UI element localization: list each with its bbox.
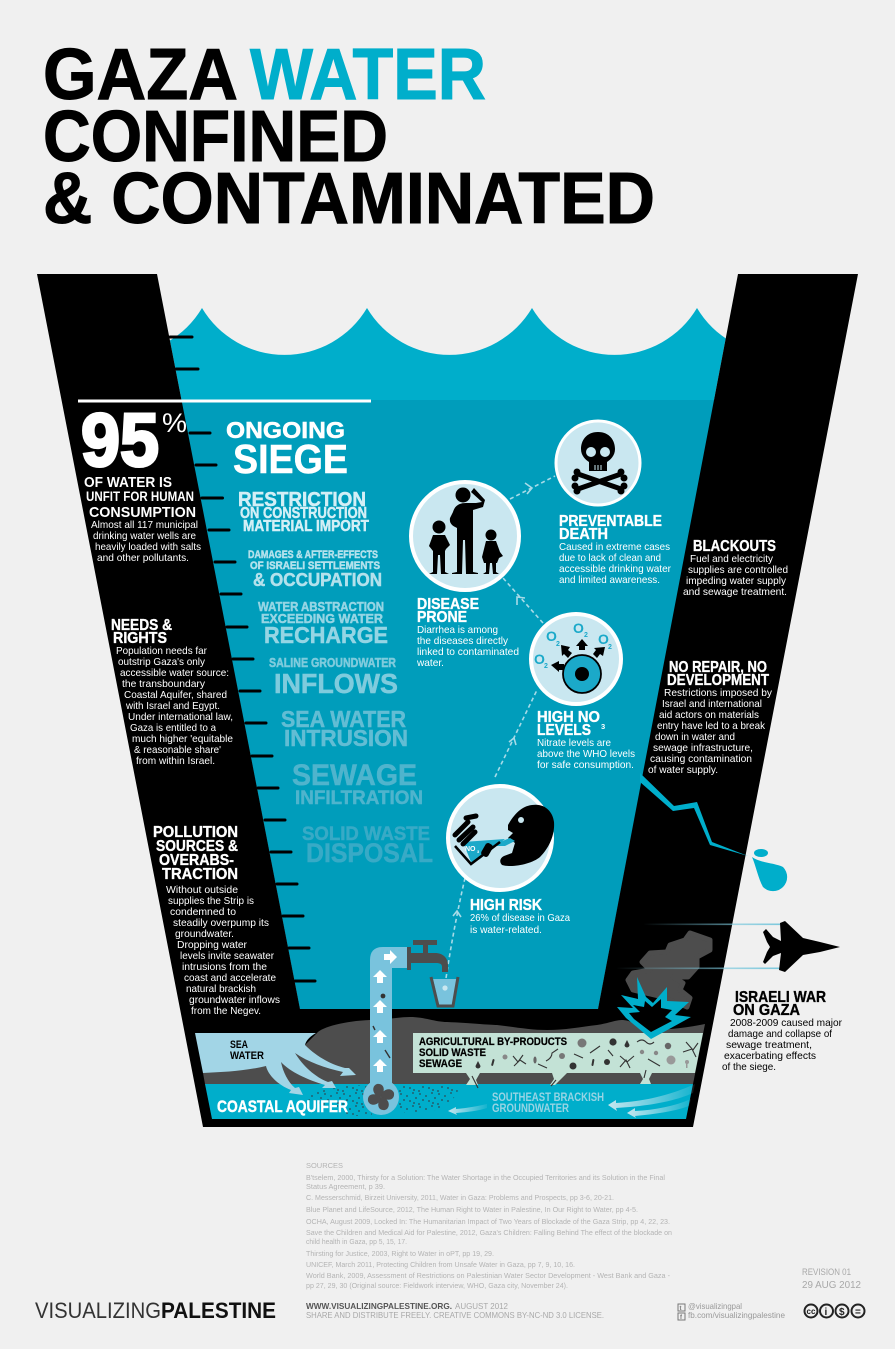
text block: no repair no development: causing contamination — [650, 754, 752, 765]
text block: preventable death — [559, 513, 672, 586]
text block: needs and rights: the transboundary — [122, 679, 206, 690]
contaminant panel — [413, 1033, 703, 1088]
aquifer sediment dots — [305, 1085, 458, 1116]
title: WATER — [250, 35, 486, 115]
text block: needs and rights: much higher 'equitable — [132, 734, 233, 745]
text block: pollution sources: from the Negev. — [191, 1006, 261, 1017]
text block: needs and rights — [111, 617, 233, 767]
cause: sewage infiltration: SEWAGE — [292, 759, 417, 792]
text block: preventable death: and limited awareness. — [559, 575, 660, 586]
text block: pollution sources: POLLUTION — [153, 824, 238, 841]
text block: disease prone: Diarrhea is among — [417, 625, 498, 636]
sources: Status Agreement, p 39. — [306, 1182, 385, 1191]
text block: blackouts: BLACKOUTS — [693, 538, 776, 555]
cause: saline groundwater inflows — [269, 656, 398, 699]
label: coastal aquifer: COASTAL AQUIFER — [217, 1097, 348, 1116]
crack in wall — [640, 773, 748, 856]
text block: Israeli war on Gaza: ON GAZA — [733, 1002, 800, 1019]
icon: drinking head circle: NO — [465, 846, 476, 853]
text block: Israeli war on Gaza: exacerbating effects — [724, 1051, 816, 1062]
icon: skull circle — [556, 421, 640, 505]
text block: Israeli war on Gaza — [722, 989, 843, 1073]
text block: needs and rights: Under international law, — [128, 712, 233, 723]
stat: 95 percent: and other pollutants. — [97, 553, 189, 564]
text block: blackouts — [683, 538, 788, 598]
stat: 95 percent: heavily loaded with salts — [95, 542, 201, 553]
stat: 95 percent: Almost all 117 municipal — [91, 520, 198, 531]
revision date: REVISION 01 — [802, 1267, 851, 1278]
text block: high NO3 levels: 3 — [601, 722, 605, 731]
title — [43, 35, 655, 239]
cause: construction material restriction — [238, 489, 369, 535]
text block: high risk: 26% of disease in Gaza — [470, 913, 570, 924]
social handles — [678, 1301, 785, 1321]
creative commons icons: = — [855, 1307, 861, 1318]
text block: Israeli war on Gaza: sewage treatment, — [726, 1040, 812, 1051]
text block: no repair no development: DEVELOPMENT — [667, 672, 769, 689]
social handles: f — [680, 1315, 683, 1321]
creative commons icons: $ — [839, 1307, 845, 1318]
sources: OCHA, August 2009, Locked In: The Humanitarian Impact of Two Years of Blockade of the Gaza Strip, pp 4, 22, 23. — [306, 1217, 670, 1226]
cause: solid waste disposal — [302, 823, 433, 868]
text block: Israeli war on Gaza: of the siege. — [722, 1062, 776, 1073]
icon: faucet — [407, 940, 448, 972]
title: GAZA — [43, 35, 238, 115]
text block: high NO3 levels: LEVELS — [537, 722, 591, 739]
figure: boy — [429, 520, 450, 574]
text block: needs and rights: Population needs far — [116, 646, 208, 657]
text block: pollution sources: levels invite seawater — [180, 951, 275, 962]
text block: needs and rights: & reasonable share' — [134, 745, 221, 756]
creative commons icons: i — [824, 1307, 828, 1318]
icon: nitrate circle: 2 — [556, 641, 560, 648]
icon: nitrate circle: 2 — [584, 632, 588, 639]
text block: pollution sources: OVERABS- — [159, 852, 234, 869]
text block: needs and rights: NEEDS & — [111, 617, 172, 634]
pump fan — [368, 1084, 394, 1110]
text block: disease prone: the diseases directly — [417, 636, 509, 647]
website and license: WWW.VISUALIZINGPALESTINE.ORG. — [306, 1301, 452, 1311]
text block: pollution sources: SOURCES & — [156, 838, 238, 855]
text block: Israeli war on Gaza: damage and collapse of — [728, 1029, 832, 1040]
logo: Visualizing Palestine: PALESTINE — [161, 1298, 276, 1323]
cause: solid waste disposal: SOLID WASTE — [302, 823, 430, 845]
icon: drinking head circle — [448, 786, 554, 890]
social handles: @visualizingpal — [688, 1301, 742, 1311]
text block: disease prone: DISEASE — [417, 596, 479, 613]
text block: pollution sources: supplies the Strip is — [168, 896, 254, 907]
text block: disease prone: PRONE — [417, 609, 467, 626]
text block: needs and rights: outstrip Gaza's only — [118, 657, 206, 668]
text block: high risk — [470, 897, 570, 936]
revision date: 29 AUG 2012 — [802, 1280, 861, 1291]
text block: Israeli war on Gaza: 2008-2009 caused major — [730, 1018, 843, 1029]
text block: preventable death: DEATH — [559, 526, 608, 543]
contaminant labels — [419, 1036, 567, 1070]
water tank: surface water with waves — [170, 308, 726, 1008]
icon: nitrate circle: 2 — [608, 644, 612, 651]
text block: blackouts: Fuel and electricity — [690, 554, 774, 565]
icon: nitrate circle: O — [573, 620, 584, 636]
contaminant labels: SOLID WASTE — [419, 1047, 486, 1059]
text block: blackouts: impeding water supply — [686, 576, 787, 587]
cause: ongoing siege: ONGOING — [226, 417, 345, 443]
stat: 95 percent — [81, 398, 201, 564]
text block: preventable death: Caused in extreme cases — [559, 542, 670, 553]
icon: nitrate circle: O — [546, 628, 557, 644]
text block: high NO3 levels: for safe consumption. — [537, 760, 634, 771]
icon: nitrate circle — [531, 614, 621, 704]
text block: pollution sources: groundwater. — [175, 929, 234, 940]
text block: no repair no development — [648, 659, 773, 776]
groundwater flow arrows — [448, 1084, 695, 1118]
figure: adult — [450, 488, 485, 574]
text block: high risk: HIGH RISK — [470, 897, 543, 914]
sources: SOURCES — [306, 1161, 343, 1170]
sources: UNICEF, March 2011, Protecting Children from Unsafe Water in Gaza, pp 7, 9, 10, 16. — [306, 1260, 575, 1269]
icon: water drop — [752, 849, 787, 891]
sea water with arrows — [195, 1033, 356, 1095]
cause: sewage infiltration — [292, 759, 423, 809]
container walls — [37, 274, 858, 1127]
level line — [78, 400, 371, 402]
text block: disease prone — [416, 596, 519, 669]
text block: needs and rights: RIGHTS — [113, 630, 167, 647]
text block: preventable death: accessible drinking water — [559, 564, 672, 575]
title: CONFINED — [43, 97, 388, 177]
text block: high NO3 levels: Nitrate levels are — [537, 738, 611, 749]
text block: high risk: is water-related. — [470, 925, 542, 936]
cause: sea water intrusion: SEA WATER — [281, 706, 406, 732]
sources — [306, 1161, 672, 1290]
figure: girl — [482, 530, 503, 574]
contaminant particles — [476, 1038, 689, 1070]
website and license — [306, 1301, 604, 1320]
sources: Blue Planet and LifeSource, 2012, The Human Right to Water in Palestine, In Our Right to Water, pp 4-5. — [306, 1205, 638, 1214]
sources: B'tselem, 2000, Thirsty for a Solution: The Water Shortage in the Occupied Territories and its Solution in the Final — [306, 1173, 665, 1182]
text block: disease prone: water. — [416, 658, 444, 669]
text block: no repair no development: entry have led to a break — [657, 721, 766, 732]
icon: fighter jet — [763, 921, 840, 972]
water tank: contaminated lower water — [181, 400, 715, 1009]
stat: 95 percent: UNFIT FOR HUMAN — [86, 489, 194, 504]
stat: 95 percent: 95 — [81, 398, 159, 482]
sources: C. Messerschmid, Birzeit University, 2011, Water in Gaza: Problems and Prospects, pp 3-6, 20-21. — [306, 1193, 614, 1202]
icon: cup of water — [431, 977, 458, 1006]
flow arrows — [373, 950, 397, 1072]
text block: disease prone: linked to contaminated — [417, 647, 519, 658]
text block: blackouts: supplies are controlled — [688, 565, 788, 576]
text block: pollution sources: natural brackish — [186, 984, 256, 995]
text block: Israeli war on Gaza: ISRAELI WAR — [735, 989, 826, 1006]
cause: abstraction exceeding recharge — [258, 599, 388, 648]
text block: pollution sources: Without outside — [166, 885, 238, 896]
label: southeast brackish groundwater — [492, 1092, 604, 1115]
pipe with pump — [363, 947, 407, 1115]
text block: preventable death: PREVENTABLE — [559, 513, 662, 530]
text block: high NO3 levels: above the WHO levels — [537, 749, 635, 760]
text block: pollution sources: intrusions from the — [182, 962, 267, 973]
sources: Save the Children and Medical Aid for Palestine, 2012, Gaza's Children: Falling Behind The effect of the blockade on — [306, 1228, 672, 1237]
text block: high NO3 levels: HIGH NO — [537, 709, 600, 726]
sources: Thirsting for Justice, 2003, Right to Water in oPT, pp 19, 29. — [306, 1249, 494, 1258]
label: sea water: WATER — [230, 1050, 264, 1062]
icon: nitrate circle: O — [534, 651, 545, 667]
level ticks — [170, 337, 315, 981]
cause: sea water intrusion — [281, 706, 408, 751]
coastal aquifer — [205, 1084, 693, 1119]
website and license: SHARE AND DISTRIBUTE FREELY. CREATIVE COMMONS BY-NC-ND 3.0 LICENSE. — [306, 1310, 604, 1320]
label: sea water: SEA — [230, 1039, 248, 1051]
cause: sea water intrusion: INTRUSION — [284, 725, 408, 751]
text block: preventable death: due to lack of clean and — [559, 553, 661, 564]
text block: needs and rights: with Israel and Egypt. — [125, 701, 220, 712]
text block: needs and rights: from within Israel. — [136, 756, 215, 767]
cause: settlements and occupation: & OCCUPATION — [253, 569, 382, 590]
cause: settlements and occupation: OF ISRAELI SETTLEMENTS — [250, 560, 380, 572]
text block: pollution sources — [153, 824, 280, 1017]
text block: no repair no development: Israel and international — [662, 699, 762, 710]
contaminant labels: SEWAGE — [419, 1058, 462, 1070]
social handles: t — [680, 1306, 682, 1312]
creative commons icons: cc — [806, 1307, 816, 1316]
cause: settlements and occupation — [248, 549, 382, 590]
creative commons icons — [804, 1304, 864, 1318]
ground layer — [203, 1017, 705, 1084]
text block: pollution sources: coast and accelerate — [184, 973, 276, 984]
logo: Visualizing Palestine: VISUALIZING — [35, 1298, 161, 1323]
smoke cloud — [628, 933, 710, 1007]
cause: abstraction exceeding recharge: WATER ABSTRACTION — [258, 599, 384, 614]
text block: pollution sources: TRACTION — [162, 866, 238, 883]
cause: ongoing siege: SIEGE — [233, 436, 348, 482]
cause: abstraction exceeding recharge: EXCEEDING WATER — [261, 611, 384, 626]
text block: pollution sources: Dropping water — [177, 940, 248, 951]
cause: construction material restriction: ON CONSTRUCTION — [240, 505, 367, 522]
text block: needs and rights: Gaza is entitled to a — [130, 723, 216, 734]
cause: saline groundwater inflows: INFLOWS — [274, 668, 398, 699]
explosion — [617, 977, 691, 1039]
icon: nitrate circle: O — [598, 631, 609, 647]
cause: abstraction exceeding recharge: RECHARGE — [264, 622, 388, 648]
icon: drinking head circle: 3 — [477, 849, 480, 854]
text block: pollution sources: steadily overpump its — [173, 918, 269, 929]
stat: 95 percent: OF WATER IS — [84, 475, 172, 491]
cause: ongoing siege — [226, 417, 348, 482]
sources: child health in Gaza, pp 5, 15, 17. — [306, 1237, 407, 1246]
stat: 95 percent: drinking water wells are — [93, 531, 196, 542]
icon: nitrate circle: 2 — [544, 663, 548, 670]
text block: needs and rights: Coastal Aquifer, shared — [124, 690, 227, 701]
text block: no repair no development: aid actors on materials — [659, 710, 759, 721]
cause: solid waste disposal: DISPOSAL — [306, 838, 433, 868]
sources: World Bank, 2009, Assessment of Restrictions on Palestinian Water Sector Development - West Bank and Gaza - — [306, 1271, 670, 1280]
causes list in water column — [226, 417, 433, 868]
title: & CONTAMINATED — [43, 159, 655, 239]
text block: no repair no development: NO REPAIR, NO — [669, 659, 767, 676]
text block: no repair no development: sewage infrastructure, — [653, 743, 753, 754]
website and license: AUGUST 2012 — [455, 1301, 508, 1311]
text block: blackouts: and sewage treatment. — [683, 587, 787, 598]
stat: 95 percent: CONSUMPTION — [89, 504, 196, 521]
text block: needs and rights: accessible water source: — [120, 668, 229, 679]
label: sea water — [230, 1039, 264, 1062]
contaminant labels: AGRICULTURAL BY-PRODUCTS — [419, 1036, 567, 1048]
text block: no repair no development: of water supply. — [648, 765, 718, 776]
jet trails — [616, 924, 780, 969]
text block: no repair no development: Restrictions imposed by — [664, 688, 773, 699]
dashed progression arrows — [445, 476, 555, 985]
label: southeast brackish groundwater: GROUNDWATER — [492, 1103, 570, 1115]
cause: sewage infiltration: INFILTRATION — [295, 787, 423, 809]
sources: pp 27, 29, 30 (Original source: Fieldwork interview, WHO, Gaza city, November 24). — [306, 1281, 568, 1290]
icon: family circle — [411, 482, 519, 590]
text block: pollution sources: groundwater inflows — [189, 995, 280, 1006]
text block: high NO3 levels — [537, 709, 635, 771]
text block: pollution sources: condemned to — [170, 907, 236, 918]
logo: Visualizing Palestine — [35, 1298, 276, 1323]
cause: saline groundwater inflows: SALINE GROUNDWATER — [269, 656, 396, 670]
text block: no repair no development: down in water and — [655, 732, 735, 743]
stat: 95 percent: % — [162, 408, 187, 438]
social handles: fb.com/visualizingpalestine — [688, 1310, 785, 1320]
contaminant drips — [466, 1073, 652, 1085]
label: southeast brackish groundwater: SOUTHEAST BRACKISH — [492, 1092, 604, 1104]
cause: construction material restriction: RESTRICTION — [238, 489, 366, 511]
cause: construction material restriction: MATERIAL IMPORT — [243, 518, 369, 535]
revision date — [802, 1267, 861, 1291]
cause: settlements and occupation: DAMAGES & AFTER-EFFECTS — [248, 549, 378, 561]
